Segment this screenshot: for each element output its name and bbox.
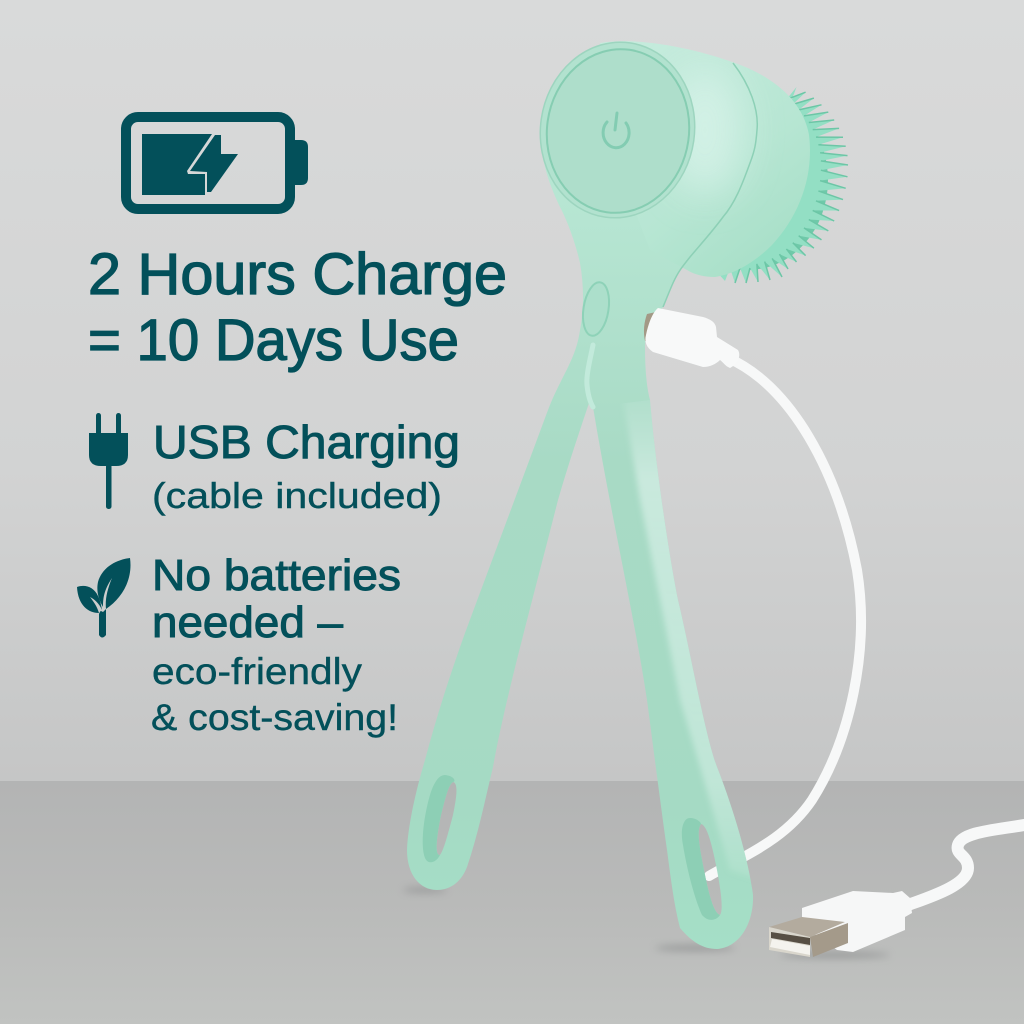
text: no batteries needed: & cost-saving! <box>151 697 398 738</box>
text: no batteries needed: eco-friendly <box>152 651 363 692</box>
icon: leaf sprout <box>77 558 130 638</box>
right leg highlight <box>628 407 749 874</box>
icon: power symbol <box>603 113 629 148</box>
brush front disc <box>529 32 706 228</box>
handle with two legs <box>407 120 753 949</box>
text: USB charging: (cable included) <box>152 475 442 516</box>
USB-A plug <box>769 891 912 957</box>
heading: charge time <box>88 242 507 373</box>
contact shadows <box>403 888 890 958</box>
USB cable end on table <box>908 825 1024 905</box>
heading: charge time: = 10 Days Use <box>88 308 459 373</box>
brush head body <box>600 41 810 277</box>
table surface <box>0 781 1024 1024</box>
left slot bevel <box>423 775 454 862</box>
charging cable loop <box>709 358 861 876</box>
text: no batteries needed: needed – <box>152 598 344 647</box>
text: USB charging <box>152 416 460 516</box>
body highlight <box>667 65 743 195</box>
text: no batteries needed <box>151 551 401 738</box>
battery icon <box>126 117 308 209</box>
heading: charge time: 2 Hours Charge <box>88 242 507 307</box>
text: no batteries needed: No batteries <box>152 551 401 600</box>
silicone bristles <box>668 87 848 283</box>
wall background <box>0 0 1024 781</box>
seam line <box>663 63 757 307</box>
right slot bevel <box>682 818 720 920</box>
USB-C connector <box>644 308 739 368</box>
text: USB charging: USB Charging <box>153 416 460 468</box>
icon: plug <box>89 413 128 509</box>
button and slit <box>579 280 613 407</box>
